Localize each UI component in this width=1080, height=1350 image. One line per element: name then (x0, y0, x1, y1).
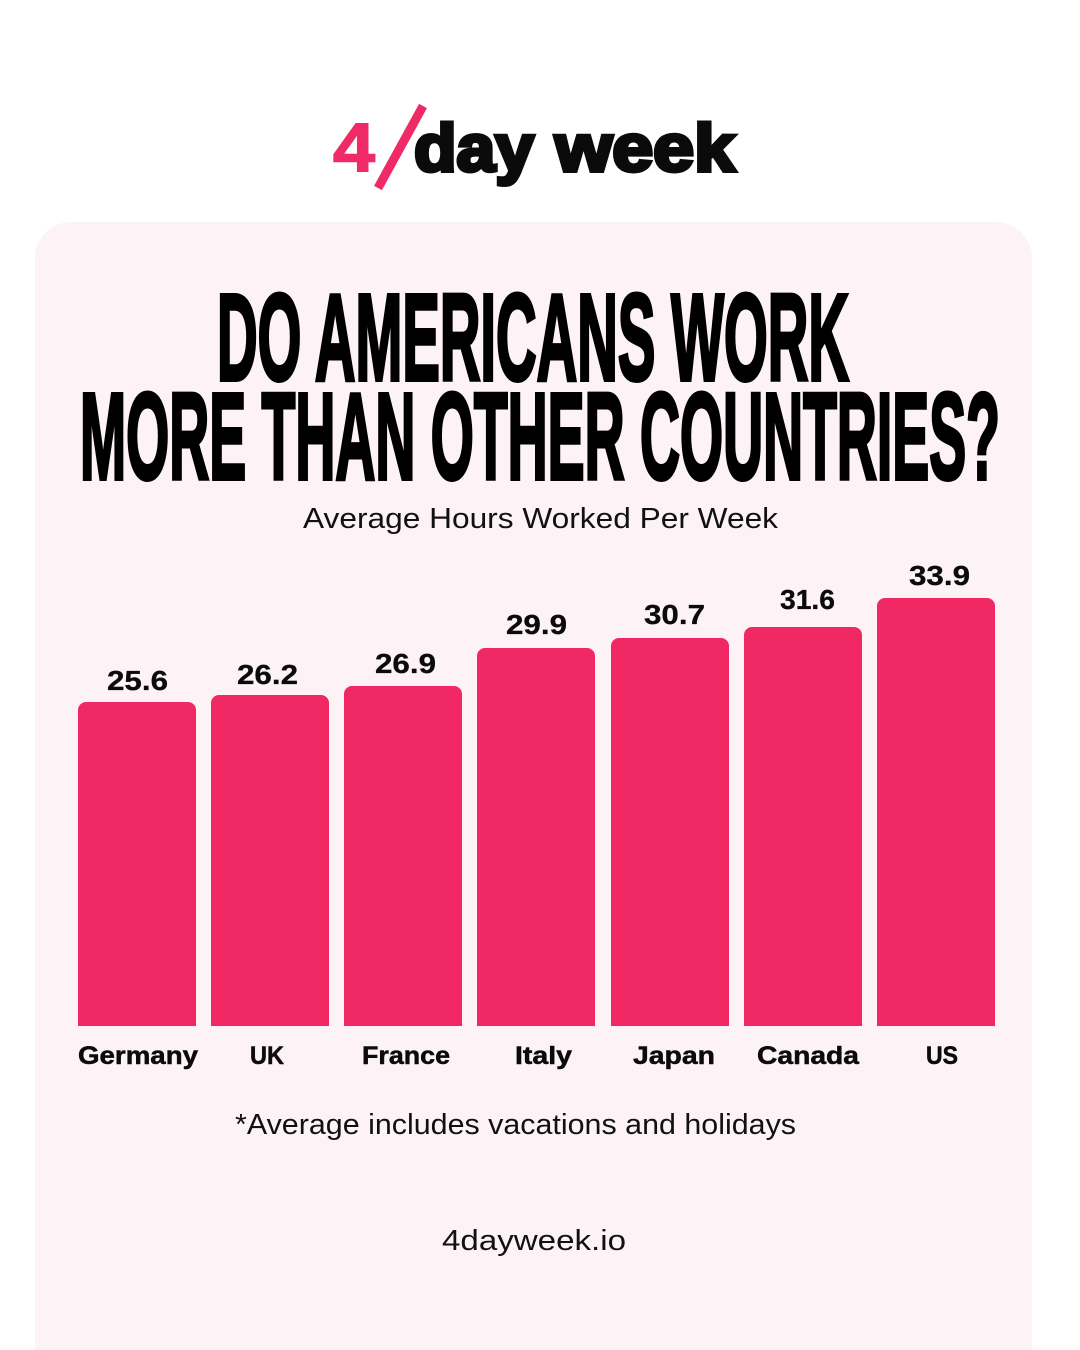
bar chart: average hours per week (78, 560, 995, 1070)
website: 4dayweek.io (442, 1225, 626, 1257)
bar: Italy 29.9 (477, 609, 595, 1070)
bar: US 33.9 (877, 560, 995, 1070)
bar: Japan 30.7 (611, 599, 729, 1070)
bar: Canada 31.6: 31.6 (780, 584, 835, 615)
bar: UK 26.2 (211, 659, 329, 1070)
bar: Japan 30.7: 30.7 (644, 599, 705, 630)
bar: UK 26.2: 26.2 (237, 659, 298, 690)
bar: US 33.9: 33.9 (909, 560, 970, 591)
logo word day: day (414, 111, 534, 186)
logo: 4/day week (333, 106, 736, 188)
bar: Germany 25.6: 25.6 (107, 665, 168, 696)
bar: Italy 29.9: Italy (515, 1042, 572, 1070)
bar: Canada 31.6: Canada (757, 1042, 860, 1070)
bar: France 26.9: France (362, 1042, 450, 1070)
bar: Germany 25.6: Germany (78, 1042, 198, 1070)
logo numeral 4: 4 (333, 109, 375, 186)
logo slash (378, 106, 423, 188)
subtitle: Average Hours Worked Per Week (303, 503, 779, 535)
bar: Japan 30.7: Japan (633, 1042, 715, 1070)
bar: Italy 29.9: 29.9 (506, 609, 567, 640)
bar: US 33.9: US (926, 1042, 958, 1070)
panel: chart background (35, 222, 1032, 1350)
bar: France 26.9: 26.9 (375, 648, 436, 679)
bar: UK 26.2: UK (250, 1042, 284, 1070)
logo word week: week (554, 111, 736, 186)
footnote: *Average includes vacations and holidays (235, 1109, 796, 1141)
title (80, 270, 1000, 506)
bar: France 26.9 (344, 648, 462, 1070)
bar: Germany 25.6 (78, 665, 198, 1070)
bar: Canada 31.6 (744, 584, 862, 1070)
